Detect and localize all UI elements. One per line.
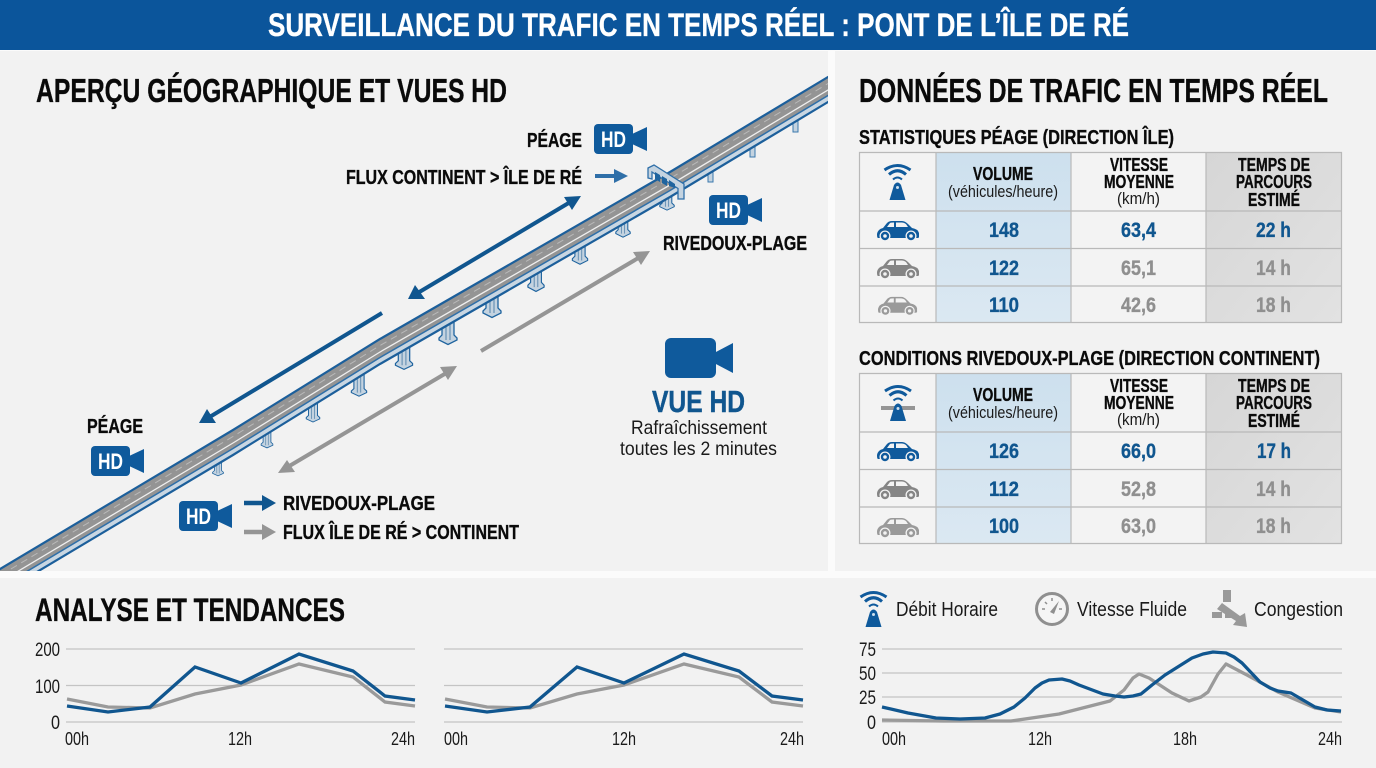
icon: gauge [1036, 594, 1068, 624]
legend: Vitesse Fluide [1077, 599, 1187, 621]
heading: geographic overview: APERÇU GÉOGRAPHIQUE ET VUES HD [36, 72, 507, 109]
row 1: 22 h [1256, 218, 1291, 242]
legend: Débit Horaire [896, 599, 998, 621]
label: lower legend: HD [186, 504, 211, 529]
line chart 3: 50 [859, 664, 876, 685]
column headers: MOYENNE [1104, 393, 1174, 413]
line chart 2: 00h [444, 729, 468, 749]
callout: vue HD: Rafraîchissement [631, 418, 768, 439]
line chart 3: 0 [867, 713, 876, 734]
label: lower legend: FLUX ÎLE DE RÉ > CONTINENT [283, 520, 519, 544]
column headers [948, 376, 1312, 431]
line chart 2: 24h [780, 729, 804, 749]
row 3: 63,0 [1121, 514, 1156, 538]
line chart 1: 100 [35, 677, 60, 698]
callout: vue HD: toutes les 2 minutes [620, 439, 777, 460]
column headers: (véhicules/heure) [948, 403, 1058, 422]
panel: geographic overview [0, 51, 848, 606]
callout: vue HD [620, 338, 777, 460]
column headers: VOLUME [973, 164, 1033, 184]
line chart 1: 24h [391, 729, 415, 749]
label: flux continent: FLUX CONTINENT > ÎLE DE RÉ [346, 165, 582, 189]
title banner: SURVEILLANCE DU TRAFIC EN TEMPS RÉEL : PONT DE L’ÎLE DE RÉ [268, 7, 1129, 43]
line chart 3: 25 [859, 688, 876, 709]
column headers: PARCOURS [1236, 172, 1312, 192]
label: top toll camera: HD [601, 127, 626, 152]
row 2 [877, 477, 1291, 501]
subheading: toll statistics: STATISTIQUES PÉAGE (DIRECTION ÎLE) [859, 125, 1174, 149]
row 2: 122 [989, 256, 1019, 280]
line chart 2 [444, 649, 804, 749]
toll gantry [648, 165, 684, 199]
line chart 3: 24h [1318, 729, 1342, 749]
line chart 3: 12h [1028, 729, 1052, 749]
row 3: 18 h [1256, 293, 1291, 317]
label: lower toll camera [87, 415, 144, 476]
row 3 [877, 514, 1291, 538]
label: Rivedoux camera: HD [716, 198, 741, 223]
row 1 [877, 218, 1291, 242]
column headers: VITESSE [1110, 155, 1168, 175]
column headers: VITESSE [1110, 376, 1168, 396]
column headers: ESTIMÉ [1248, 410, 1300, 431]
column headers: TEMPS DE [1238, 376, 1310, 396]
row 3: 100 [989, 514, 1019, 538]
line chart 3: 18h [1173, 729, 1197, 749]
callout: vue HD: VUE HD [652, 384, 745, 419]
line chart 3 [859, 640, 1342, 749]
line chart 2: 12h [612, 729, 636, 749]
line chart 3: 75 [859, 640, 876, 661]
icon: antenna on road [881, 386, 915, 421]
column headers: (véhicules/heure) [948, 182, 1058, 201]
label: Rivedoux camera: RIVEDOUX-PLAGE [663, 233, 807, 255]
arrow: blue lower [199, 313, 382, 423]
line chart 1: 0 [51, 713, 60, 734]
label: lower legend [179, 493, 519, 544]
arrow: gray upper [481, 251, 650, 351]
row 2: 65,1 [1121, 256, 1156, 280]
label: lower legend: RIVEDOUX-PLAGE [283, 493, 435, 515]
row 2: 14 h [1256, 256, 1291, 280]
line chart 1: 12h [228, 729, 252, 749]
legend: Congestion [1254, 599, 1343, 621]
row 2: 52,8 [1121, 477, 1156, 501]
row 3: 18 h [1256, 514, 1291, 538]
panel: analysis and trends [0, 578, 1376, 768]
icon: antenna [860, 592, 886, 627]
arrow: gray lower double-headed [278, 366, 457, 473]
row 1: 63,4 [1121, 218, 1156, 242]
row 3 [878, 293, 1291, 317]
row 1: 148 [989, 218, 1019, 242]
row 2 [877, 256, 1291, 280]
row 1: 17 h [1257, 439, 1291, 463]
column headers: PARCOURS [1236, 393, 1312, 413]
table: Rivedoux conditions [859, 373, 1342, 544]
row 2: 112 [989, 477, 1019, 501]
column headers: TEMPS DE [1238, 155, 1310, 175]
label: Rivedoux camera [663, 195, 807, 255]
label: lower toll camera: PÉAGE [87, 415, 143, 438]
column headers: VOLUME [973, 385, 1033, 405]
icon: antenna [884, 166, 910, 200]
line chart 1 [35, 640, 415, 749]
row 2: 14 h [1256, 477, 1291, 501]
column headers [948, 155, 1312, 210]
column headers: ESTIMÉ [1248, 189, 1300, 210]
column headers: (km/h) [1117, 189, 1160, 208]
line chart 3: 00h [882, 729, 906, 749]
label: lower toll camera: HD [98, 449, 123, 474]
column headers: (km/h) [1117, 410, 1160, 429]
row 1 [877, 439, 1291, 463]
heading: analysis and trends: ANALYSE ET TENDANCES [35, 592, 345, 628]
row 3: 42,6 [1121, 293, 1156, 317]
row 3: 110 [989, 293, 1019, 317]
bridge illustration [0, 65, 848, 606]
line chart 1: 200 [35, 640, 60, 661]
title banner [0, 0, 1376, 50]
label: top toll camera: PÉAGE [527, 129, 582, 152]
row 1: 66,0 [1121, 439, 1156, 463]
column headers: MOYENNE [1104, 172, 1174, 192]
line chart 1: 00h [65, 729, 89, 749]
panel: real-time data [835, 51, 1376, 571]
icon: congestion [1212, 590, 1247, 627]
label: top toll camera [527, 124, 647, 154]
legend [860, 590, 1343, 627]
table: toll statistics [859, 152, 1342, 323]
row 1: 126 [989, 439, 1019, 463]
arrow: blue upper double-headed [408, 196, 581, 299]
